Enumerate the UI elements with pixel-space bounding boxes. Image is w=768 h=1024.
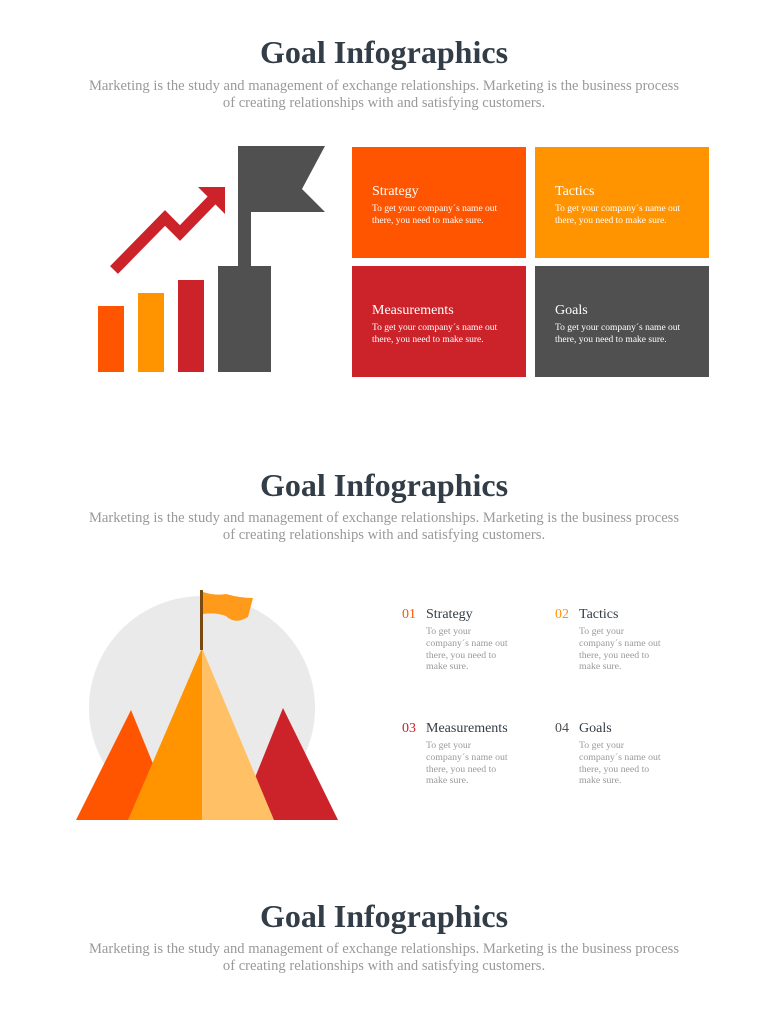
item 03 measurements — [402, 721, 508, 786]
subtitle 2 — [89, 510, 679, 543]
subtitle 1 — [89, 78, 679, 111]
item 01 strategy: company´s name out — [426, 638, 508, 649]
item 03 measurements: To get your — [426, 740, 471, 751]
item 04 goals: To get your — [579, 740, 624, 751]
item 03 measurements: 03 — [402, 721, 416, 736]
subtitle 1: Marketing is the study and management of exchange relationships. Marketing is the business process — [89, 78, 679, 94]
panel: measurements: To get your company´s name out — [372, 323, 497, 333]
subtitle 2: Marketing is the study and management of exchange relationships. Marketing is the business process — [89, 510, 679, 526]
panel: strategy: there, you need to make sure. — [372, 216, 484, 226]
panel: strategy: Strategy — [372, 184, 419, 199]
item 01 strategy: there, you need to — [426, 650, 496, 661]
item 04 goals: make sure. — [579, 775, 621, 786]
panel: tactics: there, you need to make sure. — [555, 216, 667, 226]
item 02 tactics: To get your — [579, 626, 624, 637]
panel: strategy: To get your company´s name out — [372, 204, 497, 214]
panel: measurements — [352, 266, 526, 377]
subtitle 3 — [89, 941, 679, 974]
item 04 goals: Goals — [579, 721, 612, 736]
item 04 goals: there, you need to — [579, 764, 649, 775]
title 2: Goal Infographics — [260, 467, 508, 503]
item 03 measurements: company´s name out — [426, 752, 508, 763]
subtitle 3: Marketing is the study and management of exchange relationships. Marketing is the business process — [89, 941, 679, 957]
subtitle 3: of creating relationships with and satisfying customers. — [223, 958, 545, 974]
panel: tactics: To get your company´s name out — [555, 204, 680, 214]
title 3: Goal Infographics — [260, 898, 508, 934]
item 03 measurements: there, you need to — [426, 764, 496, 775]
item 01 strategy: To get your — [426, 626, 471, 637]
panel: strategy — [352, 147, 526, 258]
panel: goals: Goals — [555, 303, 588, 318]
icon: growth chart with flag — [98, 146, 325, 372]
item 02 tactics: Tactics — [579, 607, 618, 622]
panel: goals — [535, 266, 709, 377]
panel: measurements: there, you need to make sure. — [372, 334, 484, 344]
item 01 strategy: make sure. — [426, 661, 468, 672]
item 02 tactics: 02 — [555, 607, 569, 622]
title 1: Goal Infographics — [260, 34, 508, 70]
item 01 strategy: Strategy — [426, 607, 473, 622]
panel: tactics: Tactics — [555, 184, 594, 199]
item 04 goals: 04 — [555, 721, 569, 736]
item 04 goals: company´s name out — [579, 752, 661, 763]
item 01 strategy: 01 — [402, 607, 416, 622]
subtitle 1: of creating relationships with and satisfying customers. — [223, 95, 545, 111]
icon: mountains with flag — [76, 590, 338, 820]
item 02 tactics: there, you need to — [579, 650, 649, 661]
item 03 measurements: Measurements — [426, 721, 508, 736]
panel: goals: To get your company´s name out — [555, 323, 680, 333]
item 02 tactics — [555, 607, 661, 672]
panel: measurements: Measurements — [372, 303, 454, 318]
panel: goals: there, you need to make sure. — [555, 334, 667, 344]
item 01 strategy — [402, 607, 508, 672]
item 02 tactics: company´s name out — [579, 638, 661, 649]
item 04 goals — [555, 721, 661, 786]
item 02 tactics: make sure. — [579, 661, 621, 672]
item 03 measurements: make sure. — [426, 775, 468, 786]
subtitle 2: of creating relationships with and satisfying customers. — [223, 527, 545, 543]
panel: tactics — [535, 147, 709, 258]
